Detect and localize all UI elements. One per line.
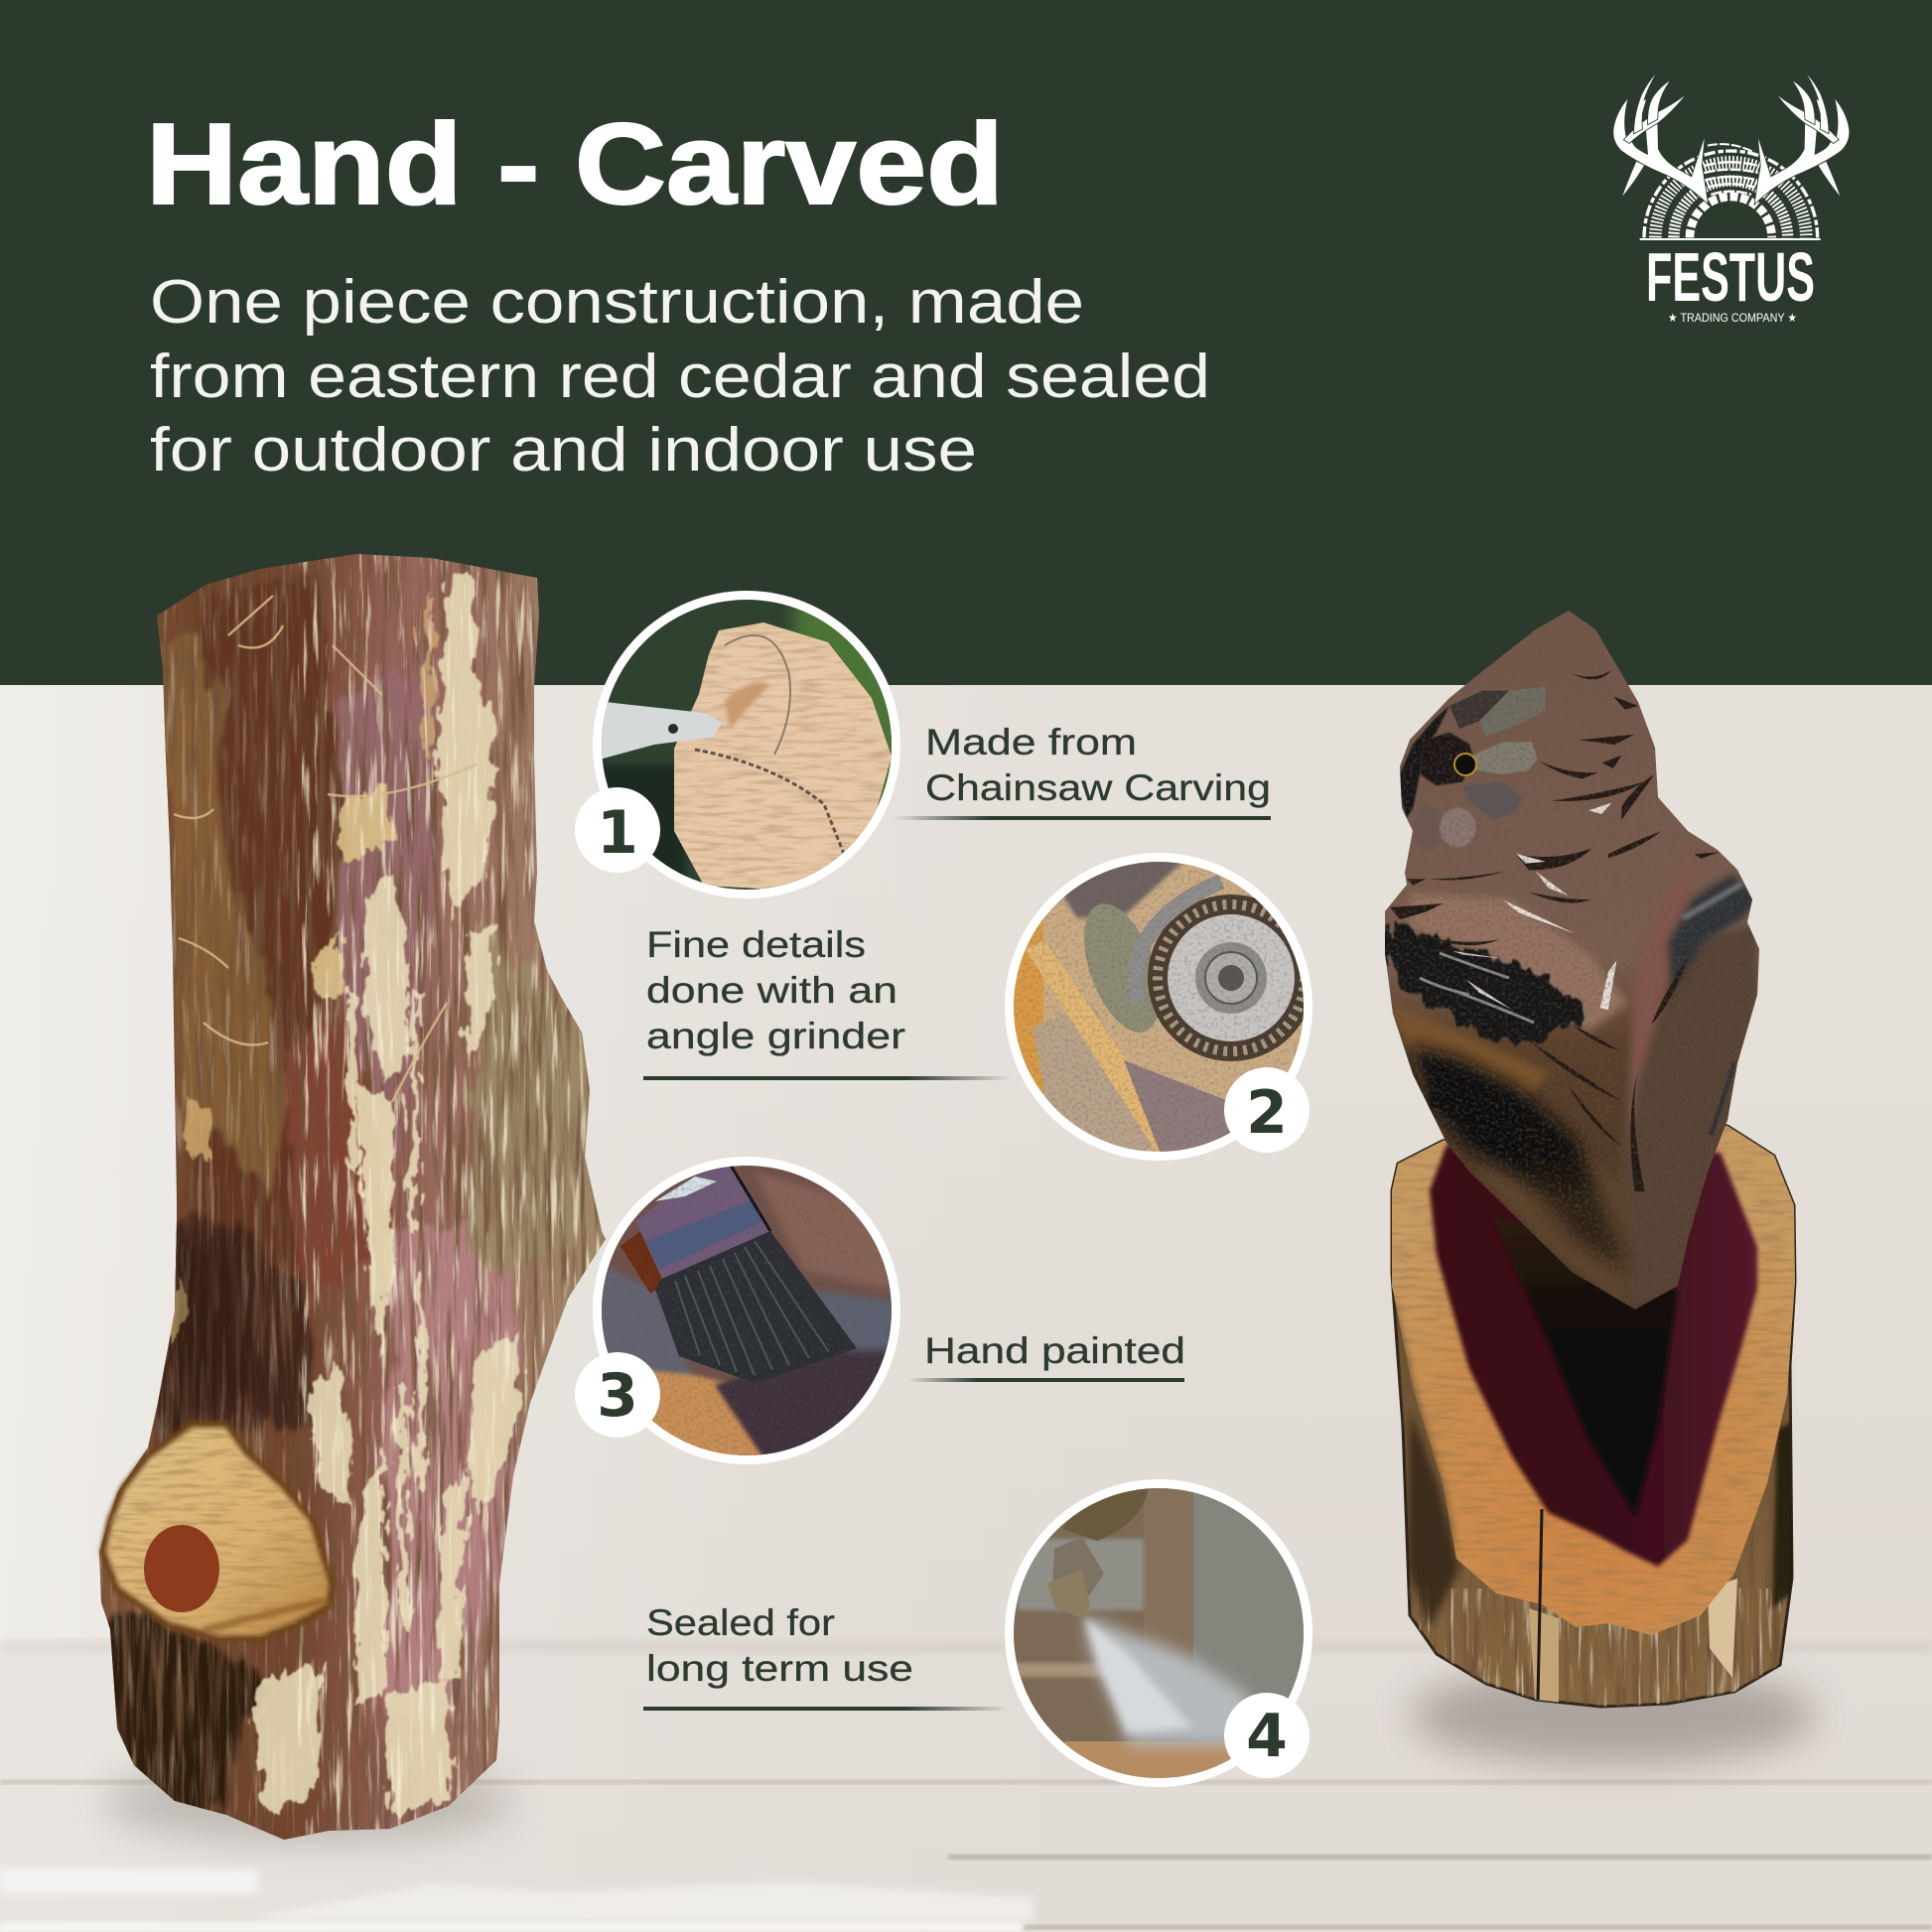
blue-grey shoulder [1668,874,1759,993]
cedar log [89,546,616,1847]
stray fibres [173,595,477,1102]
badge 3: 3 [597,1361,638,1431]
stump top face [1392,1122,1795,1635]
cut branch stub with heartwood [99,1420,338,1643]
pink-brown ridge [1626,872,1692,1136]
caption 2: angle grinder [646,1016,905,1056]
badge 4: 4 [1246,1702,1288,1771]
stump [1385,1122,1802,1718]
lower lid [1472,742,1537,774]
logo wordmark: FESTUS [1646,238,1815,316]
upper lid [1479,687,1546,737]
feather cuts [1390,670,1720,1191]
facial details, drawn in enlarged crop coordinates [1390,670,1734,1191]
floor shadows [104,1666,1817,1842]
subtitle text block: One piece construction, made [150,268,1084,337]
step 1 photo [593,591,913,898]
badge 2: 2 [1246,1078,1288,1148]
caption 2: Fine details [646,924,866,965]
lower front feathers [1482,1165,1628,1305]
carved owl on stump [1380,606,1802,1718]
eye socket [1420,733,1472,785]
step 2 photo [1005,853,1315,1162]
stump crack [1538,1509,1542,1700]
title: Hand - Carved [146,99,1004,228]
shaded left edge [169,1231,258,1430]
caption 1: Chainsaw Carving [925,767,1271,808]
caption 2 [643,924,1011,1080]
bark streak texture [89,546,616,1847]
black lower wash [1410,1044,1588,1191]
right antler [1755,74,1849,204]
badge 1: 1 [597,798,638,868]
cheek under eye [1462,782,1522,820]
step 3: hand painted [575,1157,1185,1464]
subtitle text block [150,268,1210,484]
owl tail [1492,1217,1678,1516]
wing [1618,923,1757,1311]
logo tagline: ★ TRADING COMPANY ★ [1668,311,1797,325]
logo emblem: antlers over tree rings [1613,74,1849,240]
caption 2: done with an [646,970,897,1011]
step 4: sealed [643,1479,1315,1787]
stained core [1430,1145,1757,1567]
exposed cream sapwood [165,572,521,1817]
badge 1 [575,787,660,873]
left antler [1613,74,1708,204]
black lower streak [1430,1101,1556,1162]
badge 4 [1224,1693,1310,1778]
caption 3 [908,1330,1185,1382]
caption 4 [643,1602,1008,1711]
dark wing edge [1711,1063,1734,1135]
caption 4: Sealed for [646,1602,835,1643]
header band [0,0,1932,685]
cheek hollows [1413,804,1443,850]
lighter breast area [1410,894,1628,1033]
dark heart-side bark [94,571,596,1837]
badge 3 [575,1352,660,1438]
crown black [1400,706,1449,818]
black chest band [1387,918,1582,1044]
step 4 photo [1005,1479,1315,1787]
owl body [1380,606,1767,1320]
logo: Festus Trading Company [1613,74,1849,325]
caption 1: Made from [925,722,1137,762]
step 2: angle grinder [643,853,1315,1162]
caption 4: long term use [646,1648,913,1689]
badge 2 [1224,1067,1310,1153]
subtitle text block: from eastern red cedar and sealed [150,343,1210,411]
highlights [1452,803,1616,1010]
owl eye [1454,754,1476,775]
step 3 photo [593,1157,903,1464]
caption 1 [894,722,1271,820]
caption 3: Hand painted [924,1330,1185,1371]
step 1: chainsaw carving [575,591,1271,898]
subtitle text block: for outdoor and indoor use [150,416,977,484]
